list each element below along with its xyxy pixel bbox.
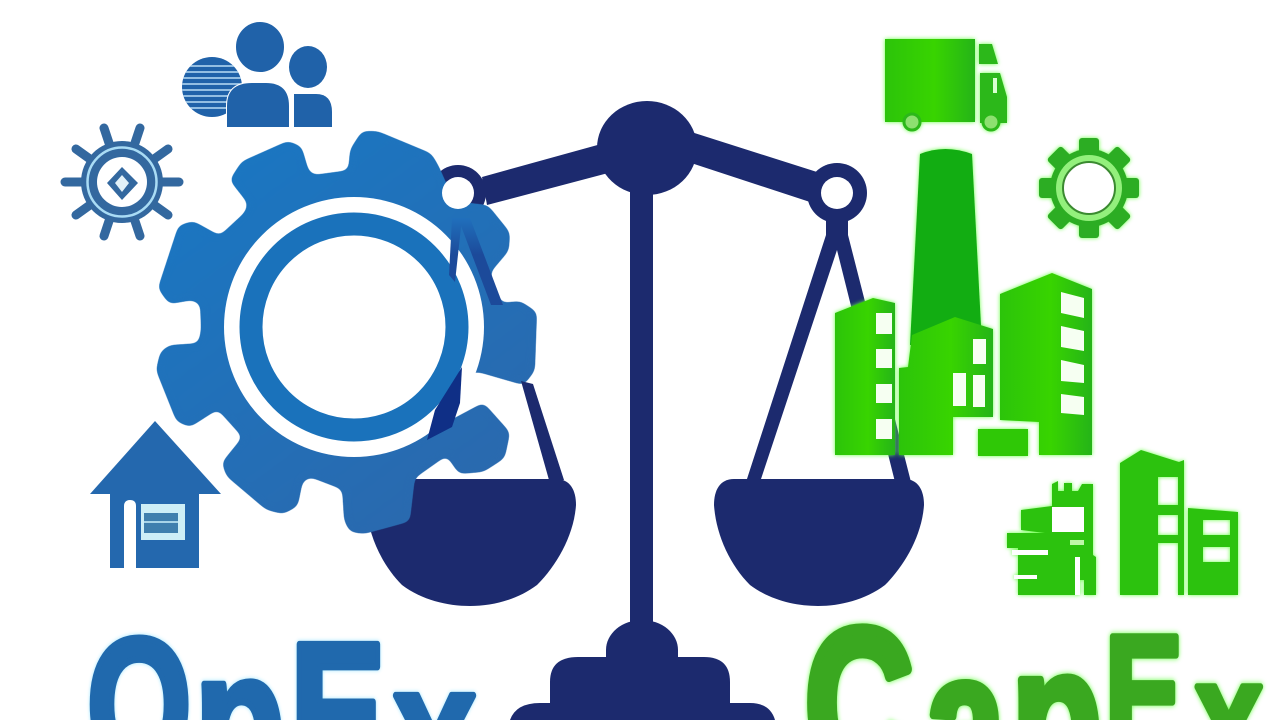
- scale: beam, post and base: [430, 101, 867, 720]
- industrial block: [1007, 481, 1096, 595]
- icon: house: [90, 421, 221, 568]
- left beam ring hole: [442, 177, 474, 209]
- icon: factory and buildings: [835, 149, 1092, 456]
- left building: [835, 298, 895, 455]
- side building: [1188, 508, 1238, 595]
- right building: [1000, 273, 1092, 455]
- centre building: [899, 317, 993, 455]
- low block: [978, 429, 1028, 456]
- icon: small green gear: [1039, 138, 1139, 238]
- large blue gear: [158, 133, 535, 532]
- left pan: [366, 479, 576, 606]
- icon: people: [180, 21, 332, 127]
- right pan and strings: [714, 218, 924, 606]
- building windows: [876, 292, 1084, 439]
- tall building: [1120, 450, 1184, 595]
- factory chimney: [910, 149, 982, 345]
- icon: lower-right buildings: [1007, 450, 1238, 595]
- icon: small blue cog with spokes: [65, 128, 179, 236]
- icon: delivery truck: [885, 39, 1007, 130]
- left pan strings: [449, 218, 564, 480]
